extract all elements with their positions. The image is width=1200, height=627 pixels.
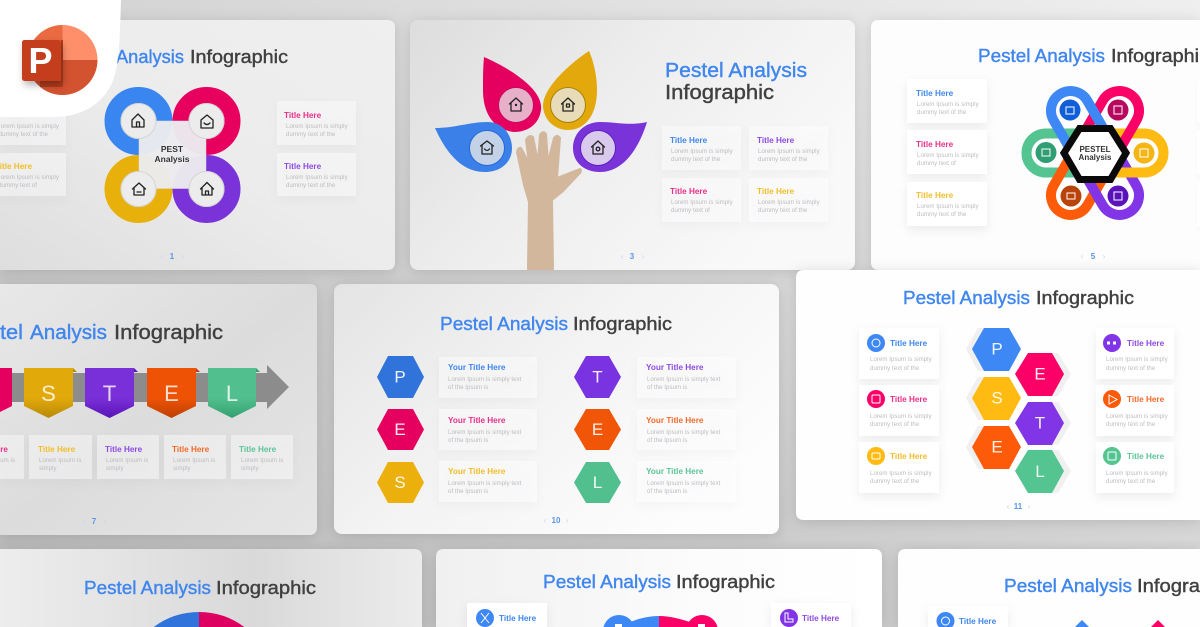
slide 10 cards: Your Title Here (646, 416, 704, 425)
slide 1 title: Analysis (116, 46, 184, 67)
slide 10 cards: Lorem Ipsum is simply text (647, 376, 721, 383)
slide 11 cards: Title Here (890, 452, 928, 461)
slide 5 title (978, 45, 1199, 66)
honeycomb S (972, 377, 1021, 420)
slide 3 title: Pestel Analysis (665, 59, 807, 82)
slide 1 right cards: Lorem Ipsum is simply (286, 123, 349, 130)
panel: slide 10 hexagon list (334, 284, 779, 534)
honeycomb E pink: E (1034, 364, 1046, 384)
slide 1 right cards: dummy text of the (286, 131, 336, 138)
hexagon L: L (593, 473, 602, 492)
slide 10 page number: › (566, 516, 569, 525)
slide 11 cards: dummy text of the (870, 365, 920, 372)
slide 3 cards: dummy text of the (758, 207, 808, 214)
honeycomb P: P (991, 340, 1003, 358)
hexagon E orange: E (592, 420, 603, 439)
slide 5 cards: Lorem Ipsum is simply (917, 203, 980, 210)
slide 10 cards: Lorem Ipsum is simply text (448, 376, 522, 383)
slide 1 left cards (0, 101, 66, 196)
slide 10 page number: 10 (552, 516, 561, 525)
bottom right card: Title Here (959, 617, 997, 626)
banner P (0, 368, 12, 412)
slide 10 cards: Lorem Ipsum is simply text (647, 480, 721, 487)
slide 3 page number: 3 (630, 252, 635, 261)
slide 5 cards: Lorem Ipsum is simply (917, 152, 980, 159)
slide 1 right cards: Title Here (284, 162, 322, 171)
slide 10 cards: Your Title Here (646, 467, 704, 476)
slide 10 cards: Lorem Ipsum is simply text (448, 429, 522, 436)
slide 11 cards: dummy text of the (870, 421, 920, 428)
slide 3 cards (662, 126, 828, 222)
slide 10 page number: ‹ (544, 516, 547, 525)
slide 11 cards: Lorem Ipsum is simply (1106, 356, 1169, 363)
slide 1 ring diagram (112, 95, 232, 215)
slide 11 cards: Title Here (890, 395, 928, 404)
slide 7 title (0, 321, 223, 344)
slide 3 cards: Lorem Ipsum is simply (758, 148, 821, 155)
slide 7 cards: Lorem Ipsum is (106, 457, 148, 464)
banner E: E (164, 381, 179, 406)
hexagon P (377, 356, 424, 398)
bottom middle cards: Title Here (499, 614, 537, 623)
slide 7 cards: um is (0, 457, 15, 464)
hexagon loop diagram (1026, 84, 1164, 222)
slide 10 page number (544, 516, 569, 525)
panel: bottom middle slide (436, 549, 882, 627)
slide 1 ring diagram: PEST (161, 144, 184, 154)
slide 11 cards: Lorem Ipsum is simply (1106, 413, 1169, 420)
slide 3 cards: Lorem Ipsum is simply (758, 199, 821, 206)
slide 3 page number: ‹ (621, 252, 624, 261)
slide 11 cards: Title Here (1127, 339, 1165, 348)
honeycomb L (1015, 450, 1064, 493)
slide 10 cards: Your Title Here (448, 467, 506, 476)
slide 11 title (903, 287, 1134, 308)
hexagon loop diagram: Analysis (1079, 153, 1112, 162)
icon: PowerPoint logo: P (28, 40, 53, 81)
slide 1 left cards: orem Ipsum is simply (1, 123, 60, 130)
slide 11 cards: dummy text of the (1106, 478, 1156, 485)
slide 7 cards: simply (39, 465, 57, 472)
slide 10 cards: of the Ipsum is (647, 384, 687, 391)
bottom middle diagram (604, 615, 718, 627)
slide 10 cards: Your Title Here (448, 363, 506, 372)
petal: blue (435, 122, 512, 172)
slide 11 cards: Title Here (890, 339, 928, 348)
bottom right diamonds (1075, 620, 1165, 627)
slide 11 cards: dummy text of the (870, 478, 920, 485)
slide 1 page number (161, 252, 185, 261)
slide 10 cards: Lorem Ipsum is simply text (647, 429, 721, 436)
hexagon L (574, 462, 621, 503)
bottom left title: Pestel Analysis (84, 577, 211, 598)
slide 11 cards: Lorem Ipsum is simply (1106, 470, 1169, 477)
slide 1 right cards: dummy text of the (286, 182, 336, 189)
slide 1 ring diagram: Analysis (155, 154, 190, 164)
honeycomb L: L (1035, 462, 1045, 481)
slide 11 cards: Title Here (1127, 452, 1165, 461)
slide 10 cards: of the Ipsum is (448, 437, 488, 444)
slide 11 page number: › (1028, 502, 1031, 511)
bottom right title: Infogra (1137, 575, 1200, 596)
white corner blob (0, 0, 121, 117)
slide 1 right cards (277, 101, 356, 196)
slide 1 right cards: Lorem Ipsum is simply (286, 174, 349, 181)
slide 11 page number: ‹ (1007, 502, 1010, 511)
slide 7 cards: Lorem Ipsum is (39, 457, 81, 464)
honeycomb P (972, 328, 1021, 371)
slide 7 title: Analysis (30, 321, 107, 344)
honeycomb shadows (966, 328, 1071, 493)
slide 10 cards: of the Ipsum is (448, 384, 488, 391)
slide 5 page number: › (1103, 252, 1106, 261)
slide 3 cards: dummy text of (671, 207, 710, 214)
slide 7 cards: Lorem Ipsum is (173, 457, 215, 464)
slide 1 page number: › (182, 252, 185, 261)
slide 10 cards: of the Ipsum is (647, 437, 687, 444)
bottom middle title (543, 571, 775, 592)
slide 1 page number: ‹ (161, 252, 164, 261)
banner L: L (226, 381, 238, 406)
slide 11 cards: Lorem Ipsum is simply (870, 413, 933, 420)
petal: pink (483, 57, 541, 132)
slide 1 left cards: orem Ipsum is simply (1, 174, 60, 181)
slide 11 title: Pestel Analysis (903, 287, 1030, 308)
hexagon S (377, 462, 424, 503)
hexagon T (574, 356, 621, 398)
slide 3 title: Infographic (665, 81, 774, 104)
bottom middle cards (467, 603, 851, 627)
slide 3 page number: › (642, 252, 645, 261)
slide 3 cards: Title Here (757, 136, 795, 145)
honeycomb S: S (991, 388, 1003, 408)
banner T (85, 368, 138, 418)
slide 11 cards: Title Here (1127, 395, 1165, 404)
slide 7 page number: 7 (92, 517, 97, 526)
bottom right title (1004, 575, 1200, 596)
slide 11 cards (859, 328, 1174, 493)
slide 7 title: Infographic (114, 321, 223, 344)
slide 3 cards: Lorem Ipsum is simply (671, 199, 734, 206)
slide 3 cards: Lorem Ipsum is simply (671, 148, 734, 155)
banner T: T (103, 381, 116, 406)
slide 10 title: Pestel Analysis (440, 313, 568, 334)
slide 7 page number: › (104, 517, 107, 526)
panel: slide 1 PEST analysis (0, 20, 395, 270)
slide 11 title: Infographic (1036, 287, 1134, 308)
slide 7 cards: re (0, 445, 8, 454)
slide 11 cards: Lorem Ipsum is simply (870, 470, 933, 477)
slide 7 cards: Lorem Ipsum is (241, 457, 283, 464)
slide 10 cards (439, 357, 736, 502)
slide 1 left cards: itle Here (0, 162, 32, 171)
hexagon E pink (377, 409, 424, 450)
hexagon S: S (394, 473, 406, 492)
bottom right card (928, 606, 1008, 627)
slide 1 title: Infographic (190, 46, 288, 67)
honeycomb T (1015, 402, 1064, 445)
slide 10 cards: Your Title Here (448, 416, 506, 425)
slide 3 cards: Title Here (670, 187, 708, 196)
panel: slide 11 hexagon honeycomb (796, 270, 1200, 520)
slide 1 title (116, 46, 288, 67)
slide 1 right cards: Title Here (284, 111, 322, 120)
slide 7 cards: Title Here (239, 445, 277, 454)
slide 10 cards: Your Title Here (646, 363, 704, 372)
slide 11 cards: Lorem Ipsum is simply (870, 356, 933, 363)
slide 10 title: Infographic (573, 313, 672, 334)
hexagon loop diagram: PESTEL (1079, 145, 1111, 154)
slide 5 cards: Title Here (916, 191, 954, 200)
banner E (147, 368, 200, 418)
bottom middle title: Pestel Analysis (543, 571, 671, 592)
bottom right title: Pestel Analysis (1004, 575, 1132, 596)
hexagon T: T (592, 368, 603, 386)
slide 5 cards: Title Here (916, 140, 954, 149)
slide 11 cards: dummy text of the (1106, 421, 1156, 428)
slide 3 page number (621, 252, 645, 261)
slide 7 title: tel (0, 321, 23, 344)
slide 5 cards (907, 79, 1200, 226)
slide 11 page number (1007, 502, 1031, 511)
slide 11 cards: dummy text of the (1106, 365, 1156, 372)
slide 3 title (665, 59, 807, 104)
hexagon E pink: E (394, 420, 406, 439)
slide 7 page number (83, 517, 107, 526)
icon: PowerPoint logo (22, 25, 98, 95)
panel: slide 5 PESTEL hexagon loops (871, 20, 1200, 270)
slide 7 cards: simply (173, 465, 191, 472)
pie chart (154, 612, 244, 627)
slide 5 cards: dummy text of the (917, 109, 967, 116)
slide 5 title: Infographi (1111, 45, 1199, 66)
panel: slide 7 arrow banners (0, 284, 317, 535)
hand illustration (517, 132, 581, 269)
slide 3 cards: dummy text of the (758, 156, 808, 163)
slide 10 cards: of the Ipsum is (647, 488, 687, 495)
slide 7 page number: ‹ (83, 517, 86, 526)
slide 7 cards: simply (241, 465, 259, 472)
slide 10 cards: Lorem Ipsum is simply text (448, 480, 522, 487)
panel: bottom left pie slide (0, 549, 422, 627)
bottom middle title: Infographic (676, 571, 775, 592)
slide 11 page number: 11 (1014, 502, 1023, 511)
slide 5 cards: Title Here (916, 89, 954, 98)
honeycomb T: T (1035, 414, 1045, 432)
slide 3 cards: Title Here (670, 136, 708, 145)
hexagon E orange (574, 409, 621, 450)
slide 5 cards: dummy text of the (917, 211, 967, 218)
slide 5 cards: dummy text of (917, 160, 956, 167)
banner S: S (41, 381, 56, 406)
honeycomb E pink (1015, 353, 1064, 396)
slide 7 cards: Title Here (105, 445, 143, 454)
slide 5 title: Pestel Analysis (978, 45, 1105, 66)
slide 5 page number: 5 (1091, 252, 1096, 261)
slide 1 page number: 1 (170, 252, 175, 261)
slide 5 page number (1081, 252, 1106, 261)
panel: bottom right slide (898, 549, 1200, 627)
bottom left title (84, 577, 316, 598)
grey arrow (0, 365, 289, 409)
hexagon P: P (394, 368, 406, 386)
slide 5 cards: Lorem Ipsum is simply (917, 101, 980, 108)
slide 1 left cards: dummy text of the (0, 131, 49, 138)
slide 7 cards (0, 435, 293, 479)
honeycomb E orange (972, 426, 1021, 469)
panel: slide 3 tree hand (410, 20, 855, 270)
slide 7 cards: simply (106, 465, 124, 472)
slide 3 cards: Title Here (757, 187, 795, 196)
honeycomb E orange: E (991, 438, 1003, 456)
slide 5 page number: ‹ (1081, 252, 1084, 261)
petal: yellow (543, 51, 597, 130)
slide 10 cards: of the Ipsum is (448, 488, 488, 495)
slide 7 cards: Title Here (38, 445, 76, 454)
banner L (208, 368, 260, 418)
slide 3 cards: dummy text of the (671, 156, 721, 163)
bottom middle cards: Title Here (802, 614, 840, 623)
slide 10 title (440, 313, 672, 334)
petal: purple (573, 122, 647, 172)
bottom left title: Infographic (216, 577, 316, 598)
slide 7 cards: Title Here (172, 445, 210, 454)
banner S (24, 368, 77, 418)
